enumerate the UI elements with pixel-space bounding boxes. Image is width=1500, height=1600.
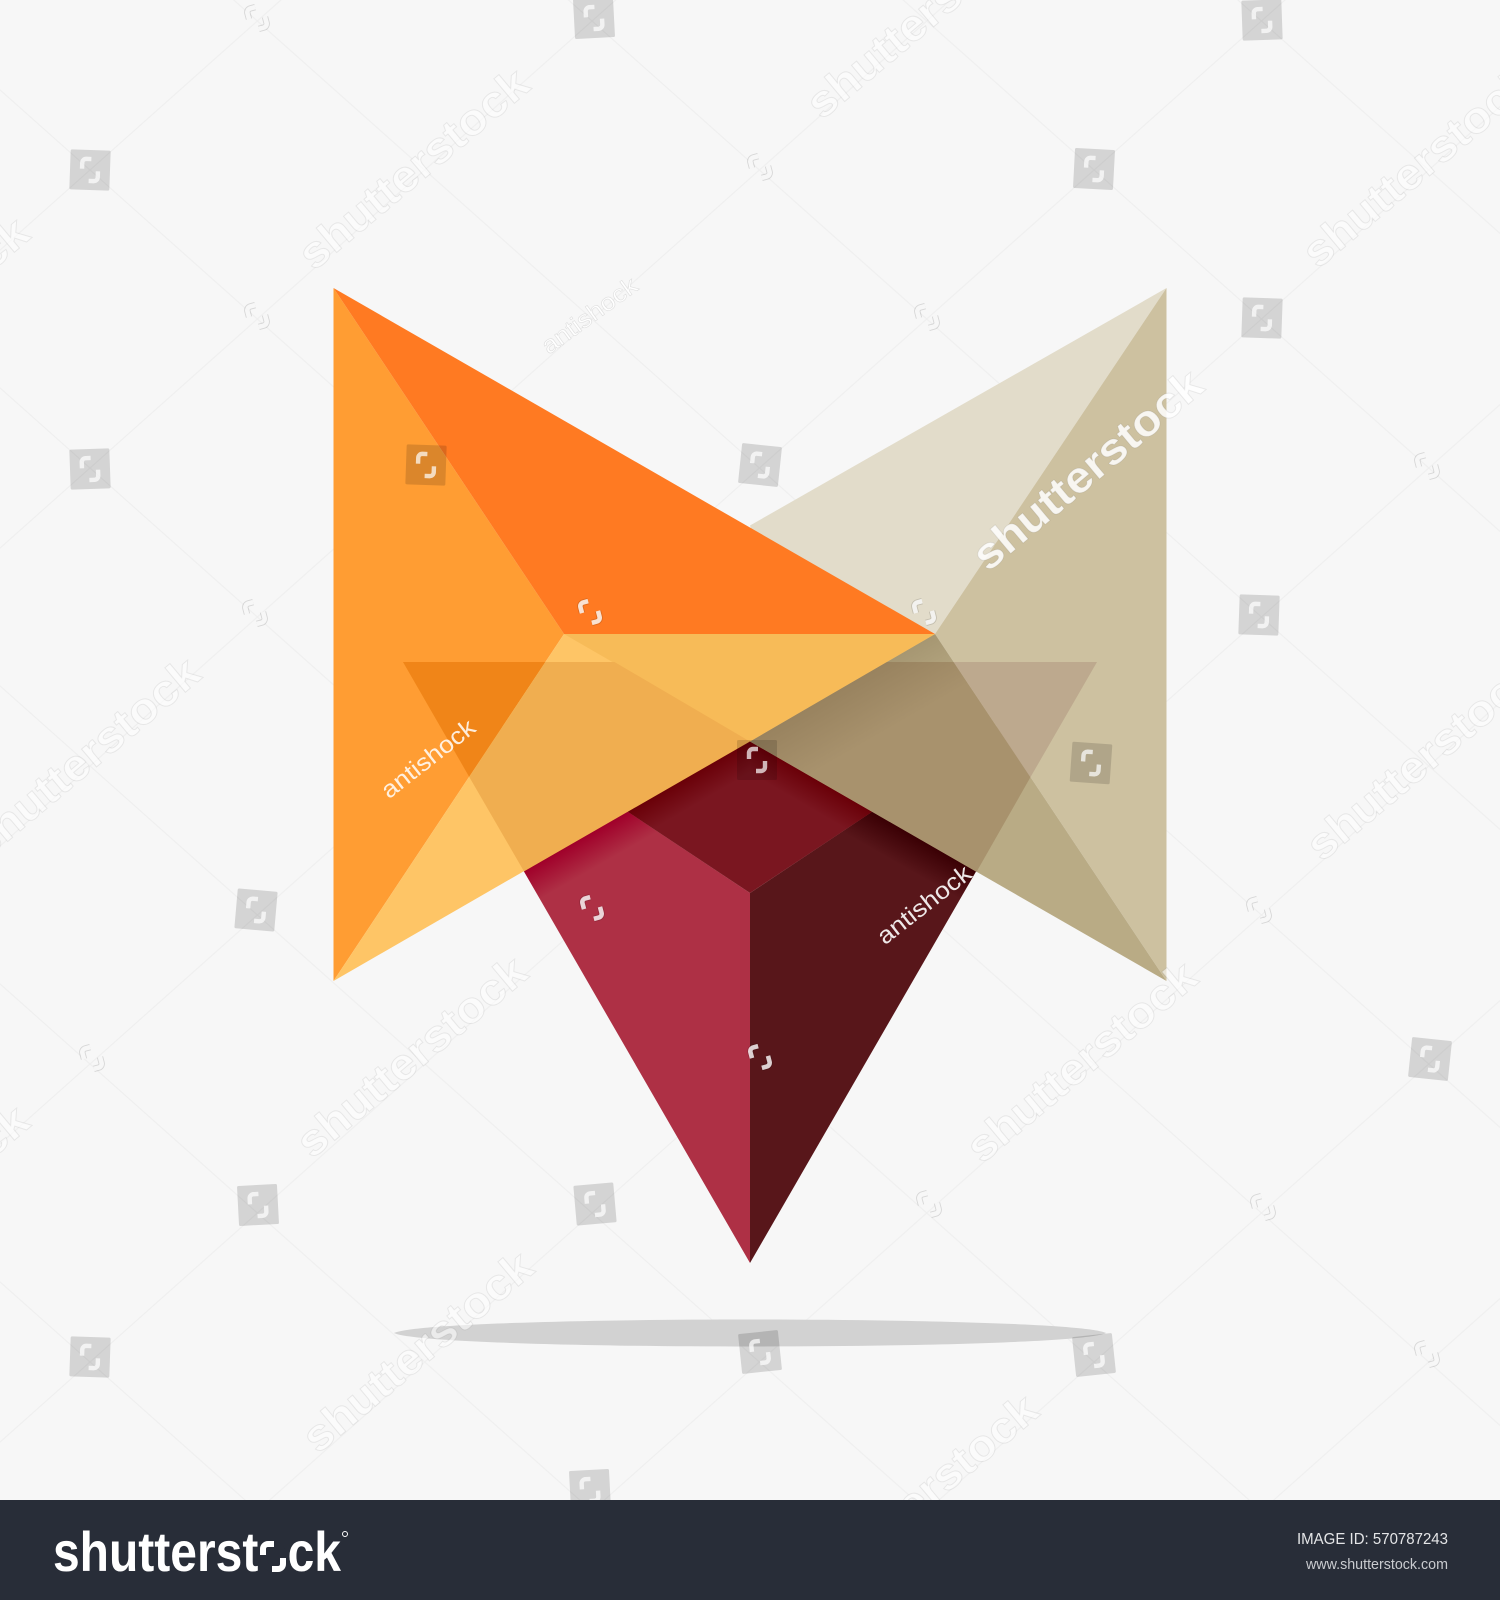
orange bottom face upper band — [564, 634, 935, 742]
orange top face — [334, 288, 935, 634]
antishock watermarks: antishock — [536, 271, 644, 360]
shutterstock watermarks: shutterstock — [957, 951, 1207, 1172]
antishock watermarks — [376, 271, 978, 950]
pyramid right face — [750, 662, 1097, 1263]
beige bottom face — [750, 634, 1166, 981]
ground shadow — [394, 1320, 1106, 1346]
antishock watermarks: antishock — [872, 859, 978, 950]
orange left face — [334, 288, 564, 981]
footer bar — [0, 1500, 1500, 1600]
orange bottom face — [334, 634, 935, 981]
shutterstock watermarks: shutterstock — [289, 58, 539, 279]
image id: IMAGE ID: 570787243 — [1297, 1531, 1448, 1548]
shutterstock watermarks: shutterstock — [293, 1241, 543, 1462]
orange bottom face overlapped by pyramid — [469, 662, 750, 871]
shutterstock watermarks: shutterstock — [287, 946, 537, 1167]
website: www.shutterstock.com — [1305, 1556, 1448, 1573]
beige fold shadow — [750, 634, 1030, 872]
shutterstock watermarks: shutterstock — [963, 359, 1213, 580]
central red pyramid — [403, 662, 1097, 1263]
beige top face — [750, 288, 1166, 634]
pyramid top face left half — [500, 700, 750, 893]
orange left face overlapped by pyramid — [403, 662, 545, 777]
footer logo: shutterstock: shutterstock — [53, 1520, 342, 1583]
left orange wing — [334, 288, 935, 981]
beige bottom face overlapped by pyramid — [750, 662, 1030, 872]
antishock watermarks: antishock — [376, 713, 482, 804]
beige right face overlapped by pyramid — [954, 662, 1097, 777]
shutterstock watermarks: shutterstock — [798, 1384, 1048, 1600]
right beige wing — [750, 288, 1166, 981]
pyramid top face right half — [750, 700, 1000, 893]
beige right face — [935, 288, 1166, 981]
pyramid left face — [403, 662, 750, 1263]
